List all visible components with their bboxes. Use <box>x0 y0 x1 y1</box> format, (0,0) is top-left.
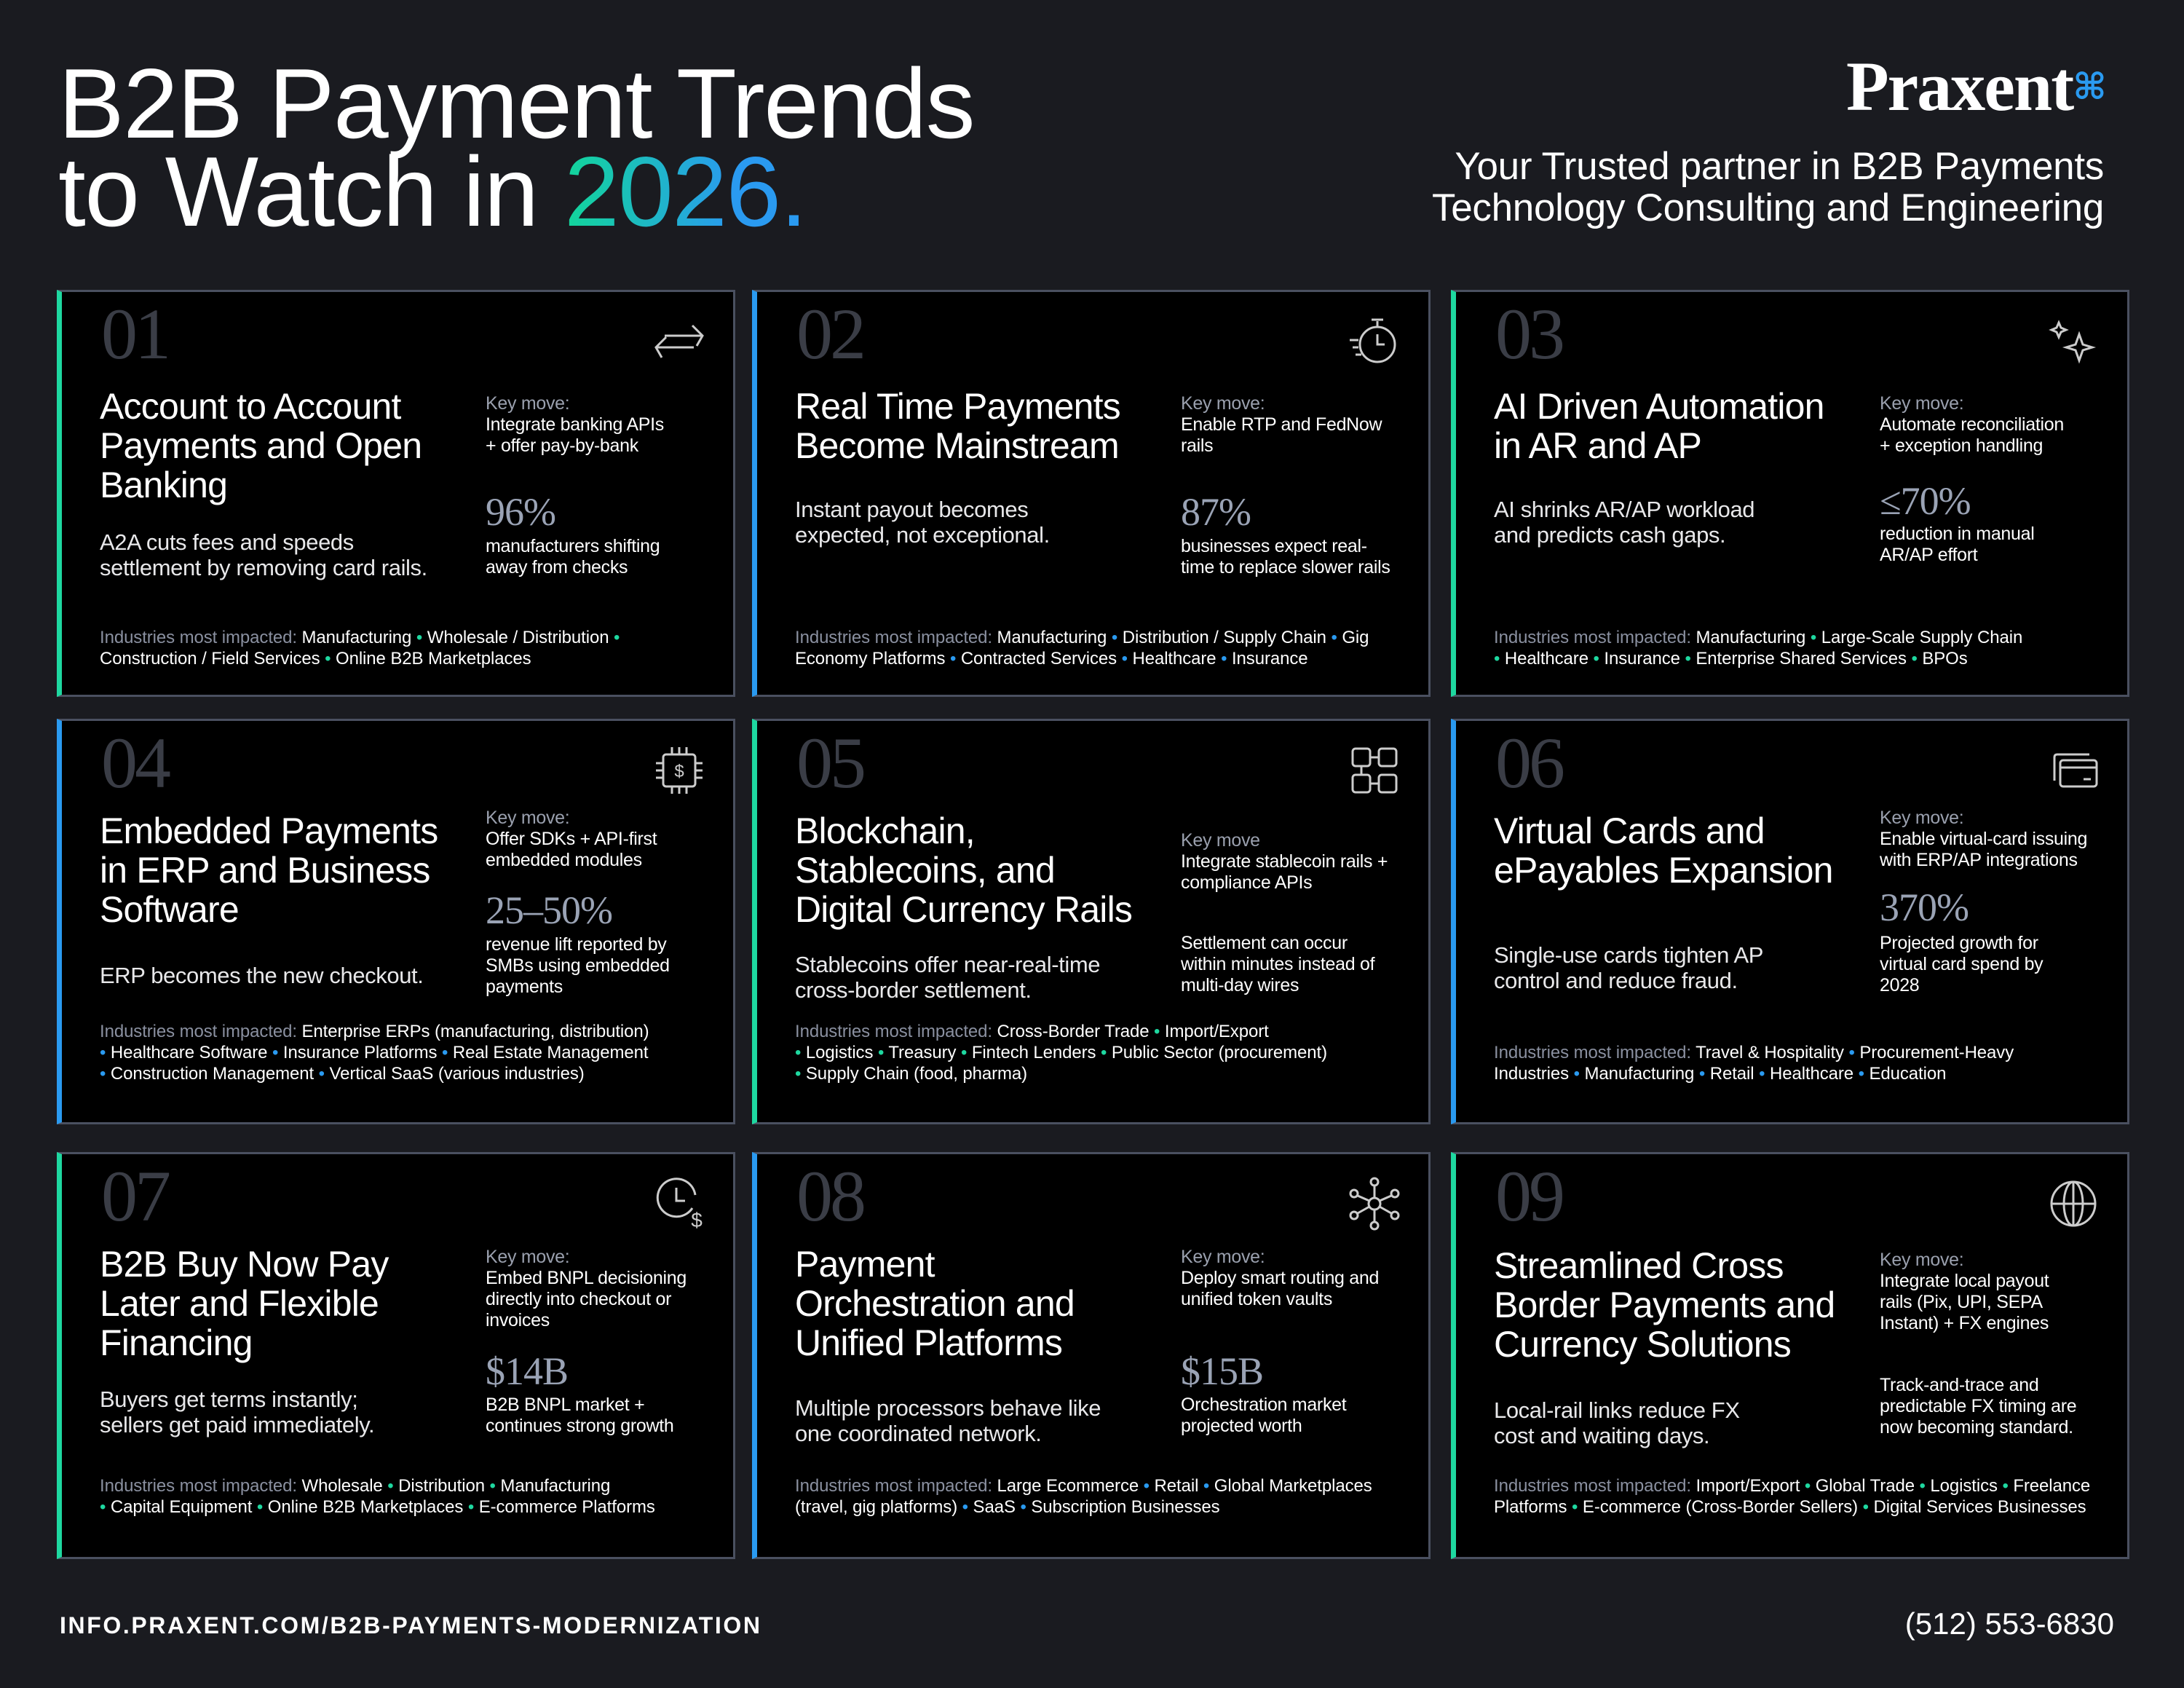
industries: Industries most impacted: Import/Export • Global Trade • Logistics • Freelance <box>1494 1476 2090 1496</box>
heading: Financing <box>100 1322 253 1363</box>
industries: Platforms • E-commerce (Cross-Border Sellers) • Digital Services Businesses <box>1494 1497 2086 1517</box>
heading: Blockchain, <box>795 811 975 851</box>
key move <box>1181 1247 1379 1310</box>
number: 09 <box>1495 1156 1562 1237</box>
number: 04 <box>101 722 168 803</box>
icon: blocks <box>1351 747 1398 794</box>
key move: Integrate banking APIs <box>486 414 664 435</box>
key move <box>1880 808 2087 870</box>
title: to Watch in 2026. <box>58 136 807 247</box>
text: one coordinated network. <box>795 1421 1042 1446</box>
icon: globe <box>2044 1175 2102 1233</box>
number: 07 <box>101 1156 168 1237</box>
key move <box>1880 393 2064 456</box>
key move: invoices <box>486 1310 550 1330</box>
heading: Banking <box>100 465 227 505</box>
icon: sparkles <box>2049 320 2096 364</box>
tagline: Technology Consulting and Engineering <box>1432 186 2104 229</box>
panel: 07 <box>57 1152 735 1559</box>
text: Local-rail links reduce FX <box>1494 1397 1740 1423</box>
heading <box>1494 811 1833 891</box>
key move <box>486 808 657 870</box>
icon: arrows <box>654 325 704 358</box>
text: Multiple processors behave like <box>795 1395 1101 1421</box>
icon: chip dollar <box>656 747 703 794</box>
key move: Enable virtual-card issuing <box>1880 829 2087 849</box>
number: 02 <box>796 293 863 374</box>
stat text: Projected growth for <box>1880 933 2038 953</box>
stat text: Settlement can occur <box>1181 933 1348 953</box>
key move: Integrate stablecoin rails + <box>1181 851 1388 872</box>
key move: Offer SDKs + API-first <box>486 829 657 849</box>
heading <box>100 1244 389 1363</box>
key move: Integrate local payout <box>1880 1271 2049 1291</box>
panel: 08 <box>752 1152 1431 1559</box>
stat text: projected worth <box>1181 1416 1302 1436</box>
heading: Unified Platforms <box>795 1322 1062 1363</box>
stat text: AR/AP effort <box>1880 545 1977 565</box>
text <box>1494 497 1754 548</box>
heading: Become Mainstream <box>795 425 1119 466</box>
key move: Automate reconciliation <box>1880 414 2064 435</box>
industries: • Logistics • Treasury • Fintech Lenders • Public Sector (procurement) <box>795 1043 1327 1062</box>
stat: 87% <box>1181 490 1251 534</box>
heading <box>1494 1246 1835 1364</box>
stat: ≤70% <box>1880 479 1971 523</box>
industries: Construction / Field Services • Online B2B Marketplaces <box>100 649 531 669</box>
tagline <box>1432 145 2104 229</box>
icon: clock dollar <box>657 1178 703 1231</box>
icon: network <box>1345 1175 1404 1233</box>
key move: Deploy smart routing and <box>1181 1268 1379 1288</box>
stat text: B2B BNPL market + <box>486 1395 644 1415</box>
stat text: SMBs using embedded <box>486 955 670 976</box>
text: and predicts cash gaps. <box>1494 522 1725 548</box>
industries: • Construction Management • Vertical SaaS (various industries) <box>100 1064 585 1084</box>
heading: Embedded Payments <box>100 811 438 851</box>
heading: ePayables Expansion <box>1494 850 1833 891</box>
industries: Industries most impacted: Manufacturing • Distribution / Supply Chain • Gig <box>795 628 1369 647</box>
industries: Industries most impacted: Enterprise ERPs (manufacturing, distribution) <box>100 1022 649 1041</box>
heading: in ERP and Business <box>100 850 430 891</box>
key move: unified token vaults <box>1181 1289 1332 1309</box>
key move: Key move: <box>486 1247 569 1267</box>
industries <box>795 1475 1372 1518</box>
key move: compliance APIs <box>1181 872 1312 893</box>
stat text: within minutes instead of <box>1181 954 1374 974</box>
number: 01 <box>101 293 168 374</box>
panel: 05 <box>752 719 1431 1124</box>
industries <box>1494 628 2022 669</box>
key move: embedded modules <box>486 850 642 870</box>
stat text <box>1880 933 2043 995</box>
industries: • Healthcare Software • Insurance Platforms • Real Estate Management <box>100 1043 648 1062</box>
text <box>100 529 427 580</box>
heading <box>795 811 1132 930</box>
text: Instant payout becomes <box>795 497 1028 522</box>
text <box>1494 942 1763 993</box>
number: 08 <box>796 1156 863 1237</box>
key move <box>486 393 664 456</box>
heading: B2B Buy Now Pay <box>100 1244 389 1285</box>
stat: $14B <box>486 1349 568 1393</box>
key move <box>486 1247 687 1331</box>
key move: + offer pay-by-bank <box>486 435 638 456</box>
icon: chip dollar: $ <box>674 762 684 781</box>
industries: Industries most impacted: Manufacturing • Wholesale / Distribution • <box>100 628 620 647</box>
heading: Payments and Open <box>100 425 422 466</box>
stat text: now becoming standard. <box>1880 1417 2073 1437</box>
heading: Digital Currency Rails <box>795 889 1132 930</box>
stat text <box>486 1395 674 1437</box>
stat text: predictable FX timing are <box>1880 1396 2076 1416</box>
panel: 06 <box>1451 719 2129 1124</box>
text: ERP becomes the new checkout. <box>100 963 423 988</box>
stat text <box>1181 536 1390 577</box>
stat text: payments <box>486 977 563 997</box>
industries: Industries • Manufacturing • Retail • Healthcare • Education <box>1494 1064 1946 1084</box>
key move: Enable RTP and FedNow <box>1181 414 1382 435</box>
text: AI shrinks AR/AP workload <box>1494 497 1754 522</box>
heading <box>100 386 422 505</box>
industries: Industries most impacted: Wholesale • Distribution • Manufacturing <box>100 1476 610 1496</box>
stat text: continues strong growth <box>486 1416 674 1436</box>
stat text <box>1181 933 1375 995</box>
footer url: INFO.PRAXENT.COM/B2B-PAYMENTS-MODERNIZATION <box>60 1612 762 1638</box>
industries: Industries most impacted: Manufacturing • Large-Scale Supply Chain <box>1494 628 2022 647</box>
logo: Praxent⌘ <box>1846 47 2105 125</box>
industries: • Supply Chain (food, pharma) <box>795 1064 1027 1084</box>
text: Single-use cards tighten AP <box>1494 942 1763 968</box>
stat text: Orchestration market <box>1181 1395 1346 1415</box>
stat: 25–50% <box>486 888 612 932</box>
text <box>100 1387 374 1437</box>
panel: 01 <box>57 290 735 697</box>
heading: Payment <box>795 1244 935 1285</box>
key move: rails <box>1181 435 1213 456</box>
stat text: virtual card spend by <box>1880 954 2043 974</box>
key move: rails (Pix, UPI, SEPA <box>1880 1292 2043 1312</box>
stat text: away from checks <box>486 557 628 577</box>
heading <box>795 386 1120 466</box>
key move: Key move: <box>486 393 569 414</box>
key move: Embed BNPL decisioning <box>486 1268 687 1288</box>
heading <box>795 1245 1075 1362</box>
text: A2A cuts fees and speeds <box>100 529 354 555</box>
heading: in AR and AP <box>1494 425 1701 466</box>
key move: with ERP/AP integrations <box>1880 850 2078 870</box>
stat text <box>1880 1375 2076 1438</box>
key move: Key move: <box>1181 393 1265 414</box>
text: expected, not exceptional. <box>795 522 1050 548</box>
key move: Key move: <box>1880 808 1963 828</box>
heading: Real Time Payments <box>795 386 1120 427</box>
key move <box>1181 393 1382 456</box>
industries: • Capital Equipment • Online B2B Marketplaces • E-commerce Platforms <box>100 1497 655 1517</box>
tagline: Your Trusted partner in B2B Payments <box>1455 145 2104 188</box>
stat text: reduction in manual <box>1880 524 2034 544</box>
footer phone: (512) 553-6830 <box>1905 1606 2114 1641</box>
stat text: multi-day wires <box>1181 975 1299 995</box>
stat text: 2028 <box>1880 975 1919 995</box>
industries: Industries most impacted: Cross-Border Trade • Import/Export <box>795 1022 1269 1041</box>
stat text <box>486 536 660 577</box>
text: settlement by removing card rails. <box>100 555 427 580</box>
key move: Instant) + FX engines <box>1880 1313 2049 1333</box>
industries: (travel, gig platforms) • SaaS • Subscription Businesses <box>795 1497 1220 1517</box>
stat text <box>486 934 670 997</box>
heading: Currency Solutions <box>1494 1324 1791 1365</box>
heading <box>100 811 438 930</box>
icon: clock dollar: $ <box>691 1209 703 1231</box>
text <box>795 952 1100 1003</box>
industries <box>1494 1043 2014 1084</box>
text <box>1494 1397 1740 1448</box>
industries <box>100 628 620 669</box>
text: Buyers get terms instantly; <box>100 1387 357 1412</box>
key move: + exception handling <box>1880 435 2043 456</box>
stat text: Track-and-trace and <box>1880 1375 2038 1395</box>
text: cost and waiting days. <box>1494 1423 1709 1448</box>
heading: Orchestration and <box>795 1283 1075 1324</box>
heading: Later and Flexible <box>100 1283 379 1324</box>
text <box>795 1395 1101 1446</box>
text <box>795 497 1050 548</box>
heading: AI Driven Automation <box>1494 386 1824 427</box>
industries <box>100 1022 649 1084</box>
text: sellers get paid immediately. <box>100 1412 374 1437</box>
heading: Streamlined Cross <box>1494 1245 1784 1286</box>
heading: Border Payments and <box>1494 1285 1835 1325</box>
stat text: businesses expect real- <box>1181 536 1367 556</box>
key move <box>1880 1250 2049 1334</box>
key move: Key move: <box>1880 393 1963 414</box>
panel: 03 <box>1451 290 2129 697</box>
text: Stablecoins offer near-real-time <box>795 952 1100 977</box>
number: 06 <box>1495 722 1562 803</box>
key move: Key move <box>1181 830 1260 851</box>
industries: • Healthcare • Insurance • Enterprise Shared Services • BPOs <box>1494 649 1968 669</box>
industries <box>795 628 1369 669</box>
panel: 02 <box>752 290 1431 697</box>
icon: stopwatch <box>1350 319 1396 363</box>
number: 05 <box>796 722 863 803</box>
heading: Account to Account <box>100 386 401 427</box>
industries <box>1494 1475 2090 1518</box>
stat text: manufacturers shifting <box>486 536 660 556</box>
panel: 09 <box>1451 1152 2129 1559</box>
heading <box>1494 386 1824 466</box>
text: control and reduce fraud. <box>1494 968 1738 993</box>
heading: Software <box>100 889 239 930</box>
stat text: time to replace slower rails <box>1181 557 1390 577</box>
title: B2B Payment Trends <box>58 48 974 159</box>
stat text <box>1880 524 2034 565</box>
stat text: revenue lift reported by <box>486 934 667 955</box>
title <box>58 48 974 247</box>
stat text <box>1181 1395 1346 1437</box>
key move: directly into checkout or <box>486 1289 671 1309</box>
industries: Industries most impacted: Large Ecommerce • Retail • Global Marketplaces <box>795 1476 1372 1496</box>
key move: Key move: <box>1181 1247 1265 1267</box>
key move: Key move: <box>486 808 569 828</box>
stat: 96% <box>486 490 555 534</box>
panel: 04 <box>57 719 735 1124</box>
icon: cards <box>2053 753 2098 788</box>
key move <box>1181 830 1388 893</box>
key move: Key move: <box>1880 1250 1963 1270</box>
heading: Stablecoins, and <box>795 850 1055 891</box>
heading: Virtual Cards and <box>1494 811 1765 851</box>
industries: Industries most impacted: Travel & Hospitality • Procurement-Heavy <box>1494 1043 2014 1062</box>
industries <box>795 1022 1327 1084</box>
industries <box>100 1475 655 1518</box>
text: cross-border settlement. <box>795 977 1032 1003</box>
number: 03 <box>1495 293 1562 374</box>
stat: 370% <box>1880 886 1969 929</box>
stat: $15B <box>1181 1349 1263 1393</box>
industries: Economy Platforms • Contracted Services • Healthcare • Insurance <box>795 649 1307 669</box>
